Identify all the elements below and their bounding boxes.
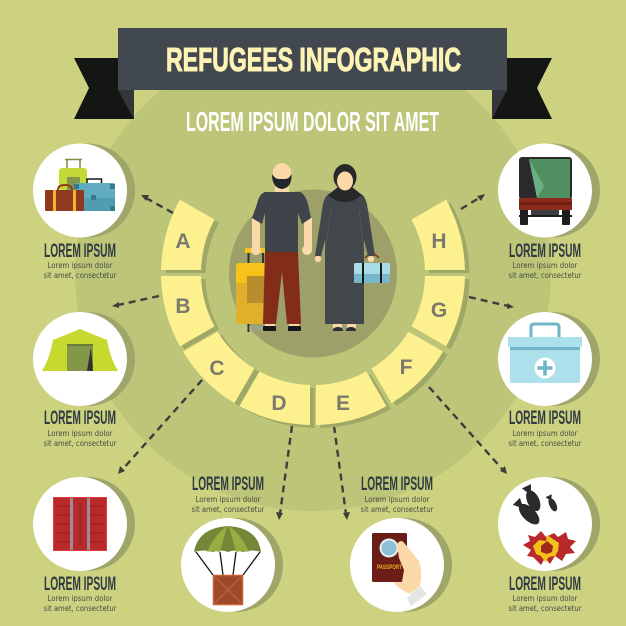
label: sit amet, consectetur [192,505,265,514]
label: LOREM IPSUM [44,241,116,262]
label [508,574,582,613]
segment letters: D [271,392,287,415]
label: Lorem ipsum dolor [48,261,113,270]
item: parachute [181,474,283,612]
item: container [33,477,135,613]
icon: shipping container [54,498,106,550]
label [192,474,265,514]
label: Lorem ipsum dolor [48,429,113,438]
label: LOREM IPSUM [44,574,116,595]
label: LOREM IPSUM [44,408,116,429]
label [44,574,117,613]
label: sit amet, consectetur [44,439,117,448]
label: Lorem ipsum dolor [512,429,578,438]
segment letters: F [400,356,413,379]
item: luggage [33,144,135,280]
inner circle [229,190,397,358]
label: Lorem ipsum dolor [364,495,430,504]
title: REFUGEES INFOGRAPHIC [166,41,461,78]
segment letters: A [175,230,191,253]
segment letters: H [431,230,447,253]
segmented ring A to H [157,198,474,432]
icon: passport in hand: PASSPORT [377,564,402,571]
item: first aid kit [498,312,600,448]
segment letters: C [209,357,225,380]
label [360,474,434,514]
woman with bag [315,164,390,331]
label [508,408,582,448]
label [44,408,117,448]
label: sit amet, consectetur [508,604,582,613]
item: tent [33,312,135,448]
icon: tent [42,329,118,371]
item: bombs [498,477,600,613]
label: Lorem ipsum dolor [512,261,578,270]
icon: parachute [194,526,261,604]
segment letters [175,230,447,415]
segment letters: E [336,392,350,415]
label [508,241,582,280]
subtitle: LOREM IPSUM DOLOR SIT AMET [186,106,439,137]
large background circle [75,35,551,511]
icon: luggage [45,160,115,211]
icon: first aid kit [508,324,582,383]
item: truck [498,144,600,280]
label [44,241,117,280]
label: LOREM IPSUM [361,474,433,495]
label: Lorem ipsum dolor [196,495,261,504]
dashed arrows [112,194,514,520]
label: Lorem ipsum dolor [48,594,113,603]
item: passport [350,474,452,612]
label: Lorem ipsum dolor [512,594,578,603]
label: sit amet, consectetur [44,604,117,613]
segment letters: B [175,295,191,318]
label: sit amet, consectetur [360,505,434,514]
label: sit amet, consectetur [508,439,582,448]
segment letters: G [431,299,447,322]
ribbon banner with title [74,28,552,119]
man with suitcase [236,163,312,332]
label: sit amet, consectetur [508,271,582,280]
label: sit amet, consectetur [44,271,117,280]
icon: truck [519,157,572,225]
icon: bombs and explosion [512,484,576,565]
label: LOREM IPSUM [192,474,264,495]
